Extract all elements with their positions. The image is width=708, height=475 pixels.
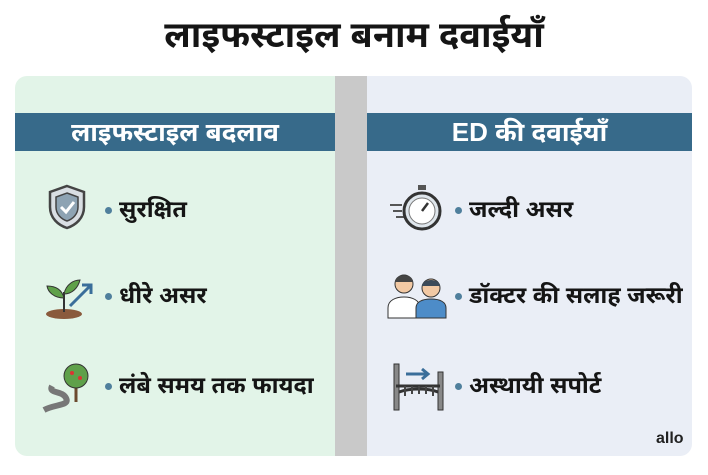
text: long-term benefit: लंबे समय तक फायदा [119,372,314,398]
text: safe: सुरक्षित [119,196,187,222]
text: slow effect: धीरे असर [119,282,207,308]
panel: medicines [367,76,692,456]
icon: sprout [46,280,92,319]
icon: doctor and patient [388,274,446,318]
panel: lifestyle [15,76,335,456]
icon: crutch bridge [394,364,444,410]
heading: lifestyle: लाइफस्टाइल बदलाव [71,117,279,147]
heading: medicines [367,113,692,151]
text: quick effect: जल्दी असर [469,196,573,222]
title: लाइफस्टाइल बनाम दवाईयाँ [164,14,544,55]
text: temporary support: अस्थायी सपोर्ट [469,372,601,398]
text: doctor advice needed: डॉक्टर की सलाह जरूरी [469,282,683,308]
icon: stopwatch [390,185,442,230]
icon: tree and path [42,364,88,412]
icon: shield [48,184,86,230]
heading: medicines: ED की दवाईयाँ [452,117,607,147]
divider [335,76,367,456]
logo: allo [656,430,684,447]
heading: lifestyle [15,113,335,151]
